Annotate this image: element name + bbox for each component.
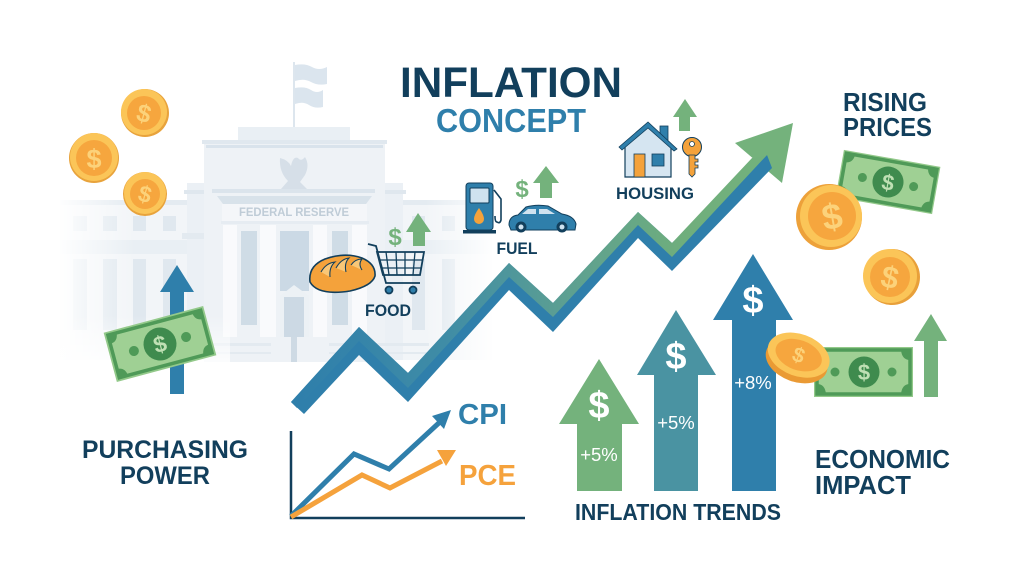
label: economic impact: IMPACT	[815, 470, 911, 500]
chart axes	[291, 431, 525, 518]
arrow: +5% low: +5%	[580, 444, 618, 465]
flag	[293, 62, 327, 128]
coin: large rising prices: $	[819, 195, 846, 238]
arrow: +5% mid	[637, 310, 716, 491]
arrow: +5% low	[559, 359, 639, 491]
coin: tilted: $	[789, 343, 808, 369]
label: PCE: PCE	[459, 460, 516, 492]
arrow: +5% low: $	[588, 385, 610, 427]
icon: bread	[310, 255, 375, 292]
arrow: +8% high	[713, 254, 793, 491]
housing group	[616, 99, 702, 203]
title	[400, 59, 622, 139]
housing price arrow	[673, 99, 697, 131]
label: economic impact: ECONOMIC	[815, 444, 950, 474]
main rising trend arrow	[291, 123, 793, 414]
fuel group	[463, 166, 576, 258]
label: rising prices: PRICES	[843, 114, 932, 142]
label: purchasing power: PURCHASING	[82, 436, 248, 464]
building: Federal Reserve	[50, 62, 495, 365]
label: housing: HOUSING	[616, 184, 694, 203]
banknote: rising prices	[836, 150, 940, 214]
food group	[310, 213, 431, 320]
economic impact arrow	[914, 314, 947, 397]
arrow: +8% high: $	[742, 280, 764, 322]
coins: top left cluster	[69, 89, 169, 216]
banknote: purchasing power	[104, 306, 216, 382]
line: PCE	[291, 450, 456, 517]
label: inflation trends: INFLATION TRENDS	[575, 499, 781, 525]
label: economic impact	[815, 444, 950, 500]
banknote: purchasing power: $	[150, 330, 170, 358]
icon: car	[509, 205, 576, 232]
line: CPI	[291, 410, 451, 516]
label: rising prices: RISING	[843, 89, 927, 117]
coin: small rising prices	[863, 249, 920, 305]
title: INFLATION	[400, 59, 622, 107]
label: food: FOOD	[365, 301, 411, 320]
fuel price marker: $	[515, 176, 529, 203]
label: CPI: CPI	[458, 399, 507, 431]
purchasing power arrow	[160, 265, 194, 394]
banknote: rising prices: $	[880, 169, 896, 196]
banknote: economic impact	[814, 347, 913, 397]
coin: tilted	[759, 324, 836, 391]
icon: key	[682, 138, 702, 177]
icon: house	[619, 122, 677, 177]
arrow: +8% high: +8%	[734, 372, 772, 393]
arrow: +5% mid: $	[665, 336, 687, 378]
title: CONCEPT	[436, 102, 586, 139]
coin: large rising prices	[796, 184, 862, 250]
label: rising prices	[843, 89, 932, 142]
food price marker: $	[388, 224, 402, 251]
label: purchasing power: POWER	[120, 462, 210, 490]
coins: top left cluster: $	[133, 99, 154, 129]
icon: shopping cart	[368, 244, 424, 294]
building sign: FEDERAL RESERVE	[239, 207, 349, 219]
eagle	[280, 157, 308, 189]
coin: small rising prices: $	[878, 259, 902, 296]
banknote: economic impact: $	[858, 360, 870, 385]
label: fuel: FUEL	[496, 239, 538, 258]
coins: top left cluster: $	[135, 180, 155, 208]
label: purchasing power	[82, 436, 248, 490]
inflation trend arrows	[559, 254, 793, 491]
coins: top left cluster: $	[86, 144, 102, 174]
arrow: +5% mid: +5%	[657, 412, 695, 433]
icon: fuel pump	[463, 183, 501, 234]
line chart: CPI and PCE	[291, 399, 525, 518]
